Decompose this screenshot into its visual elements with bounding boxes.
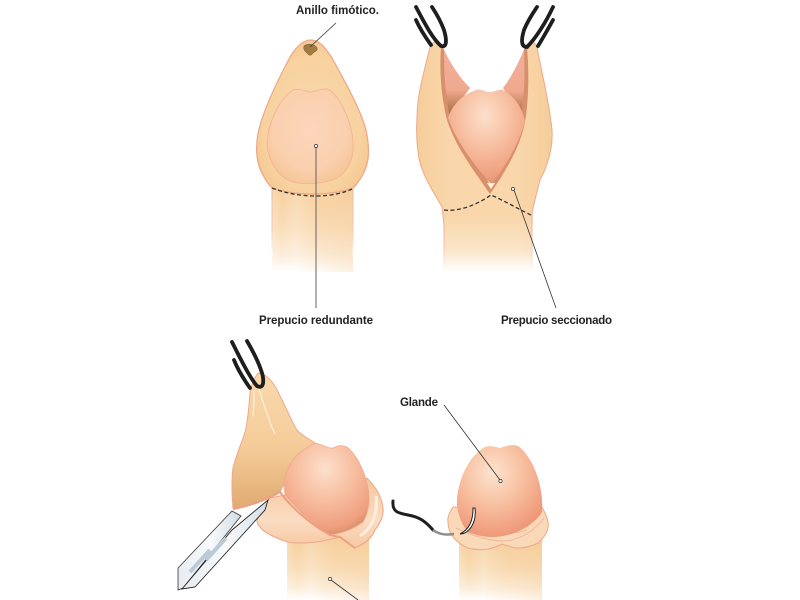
notch highlight bbox=[487, 183, 495, 189]
left suture bbox=[416, 7, 446, 46]
scissors bbox=[178, 500, 268, 590]
foreskin outline bbox=[257, 40, 368, 194]
right suture bbox=[522, 7, 553, 47]
phimotic ring bbox=[304, 44, 317, 55]
leader line: glans bbox=[444, 405, 502, 483]
panel: top right, sectioned foreskin bbox=[416, 7, 612, 327]
shaft bbox=[287, 535, 369, 600]
shaft bbox=[272, 180, 354, 272]
suture thread bbox=[393, 501, 454, 535]
label: Glande: Glande bbox=[400, 397, 438, 409]
label: Anillo fimótico: Anillo fimótico. bbox=[296, 5, 379, 17]
collar folds bbox=[456, 518, 544, 541]
leader line: sectioned prepuce bbox=[511, 187, 556, 308]
incision edges bbox=[440, 47, 528, 194]
suture bbox=[232, 341, 263, 388]
label: Prepucio redundante: Prepucio redundante bbox=[259, 315, 373, 327]
glans bbox=[448, 89, 525, 184]
inner surfaces bbox=[443, 47, 470, 118]
incision dashed line bbox=[272, 188, 352, 196]
dashed incision bbox=[444, 195, 533, 216]
opened foreskin flaps and shaft bbox=[417, 42, 552, 272]
redundant prepuce oval bbox=[267, 89, 353, 184]
glans bbox=[457, 445, 542, 537]
cut edge bbox=[233, 492, 355, 548]
collar highlight bbox=[360, 496, 376, 536]
leader line: lower shaft bbox=[328, 577, 358, 600]
collar bbox=[448, 507, 548, 550]
panel: top left, phimotic ring and redundant foreskin bbox=[257, 5, 379, 327]
shaft bbox=[459, 540, 542, 600]
glans bbox=[284, 443, 369, 535]
panel: bottom right, glans and suture bbox=[393, 397, 548, 600]
leader line: redundant prepuce bbox=[314, 144, 318, 308]
rolled collar bbox=[257, 478, 383, 548]
skin folds bbox=[253, 386, 275, 434]
stretched foreskin bbox=[232, 373, 315, 508]
needle bbox=[460, 508, 475, 534]
leader line: phimotic ring bbox=[310, 23, 336, 47]
panel: bottom left, lateral incision bbox=[178, 341, 383, 600]
fade at shaft base bbox=[438, 215, 538, 273]
label: Prepucio seccionado: Prepucio seccionado bbox=[501, 315, 612, 327]
